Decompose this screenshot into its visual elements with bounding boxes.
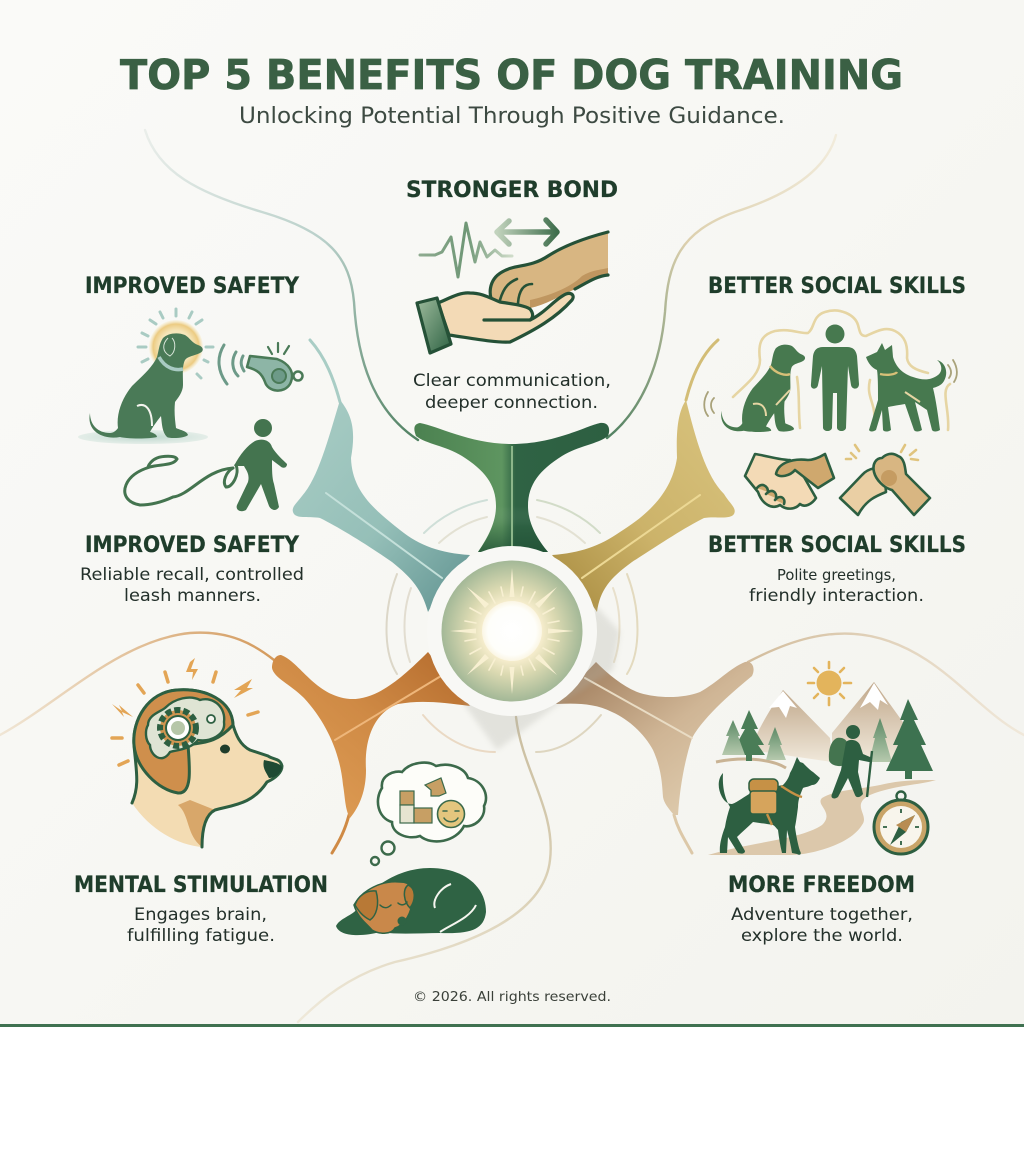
center sun orb	[427, 546, 620, 750]
icon: handshake	[745, 454, 834, 509]
icon: two-way arrow	[497, 220, 557, 244]
body: more freedom: Adventure together,	[731, 905, 913, 925]
body: social skills: Polite greetings,	[777, 566, 896, 584]
branch: gold social	[552, 400, 735, 612]
body: improved safety: Reliable recall, controlled	[80, 565, 304, 585]
title: TOP 5 BENEFITS OF DOG TRAINING	[120, 51, 903, 99]
concentric ripple arcs	[386, 500, 638, 752]
branch: tan freedom	[556, 662, 754, 815]
icon: paw in hand	[417, 232, 608, 353]
heading: stronger bond: STRONGER BOND	[406, 177, 618, 203]
copyright: © 2026. All rights reserved.	[413, 989, 611, 1005]
icon: compass	[874, 792, 928, 854]
heading: more freedom: MORE FREEDOM	[728, 872, 915, 898]
branch: teal safety	[293, 400, 470, 612]
body line: more freedom: explore the world.	[741, 926, 903, 946]
body line: social skills: friendly interaction.	[749, 586, 924, 606]
icon: dog head with gears	[112, 658, 282, 847]
icon: adventure scene	[708, 662, 936, 855]
subtitle: Unlocking Potential Through Positive Guidance.	[239, 104, 785, 129]
heading: mental stimulation: MENTAL STIMULATION	[74, 872, 328, 898]
body line: improved safety: leash manners.	[124, 586, 261, 606]
body: mental stimulation: Engages brain,	[134, 905, 267, 925]
heading: better social skills lower: BETTER SOCIAL SKILLS	[708, 532, 966, 558]
body line: stronger bond: deeper connection.	[425, 393, 598, 413]
icon: whistle	[219, 343, 302, 391]
icon: person walking with leash	[125, 419, 287, 511]
heading: improved safety lower: IMPROVED SAFETY	[85, 532, 300, 558]
icon: heartbeat pulse	[420, 223, 512, 277]
icon: dogs and person with aura	[704, 310, 957, 432]
heading: improved safety top: IMPROVED SAFETY	[85, 273, 300, 299]
body line: mental stimulation: fulfilling fatigue.	[127, 926, 275, 946]
body: stronger bond: Clear communication,	[413, 371, 611, 391]
footer rule	[0, 1024, 1024, 1027]
connector curves	[0, 130, 1024, 1022]
branch: orange mental	[272, 652, 470, 818]
branch: green bond	[414, 423, 609, 552]
icon: thought cloud with puzzle and smile	[371, 763, 486, 865]
icon: sitting dog with halo	[78, 309, 213, 444]
icon: sleeping dog	[336, 868, 486, 935]
heading: better social skills top: BETTER SOCIAL SKILLS	[708, 273, 966, 299]
icon: paw high five	[840, 445, 930, 515]
